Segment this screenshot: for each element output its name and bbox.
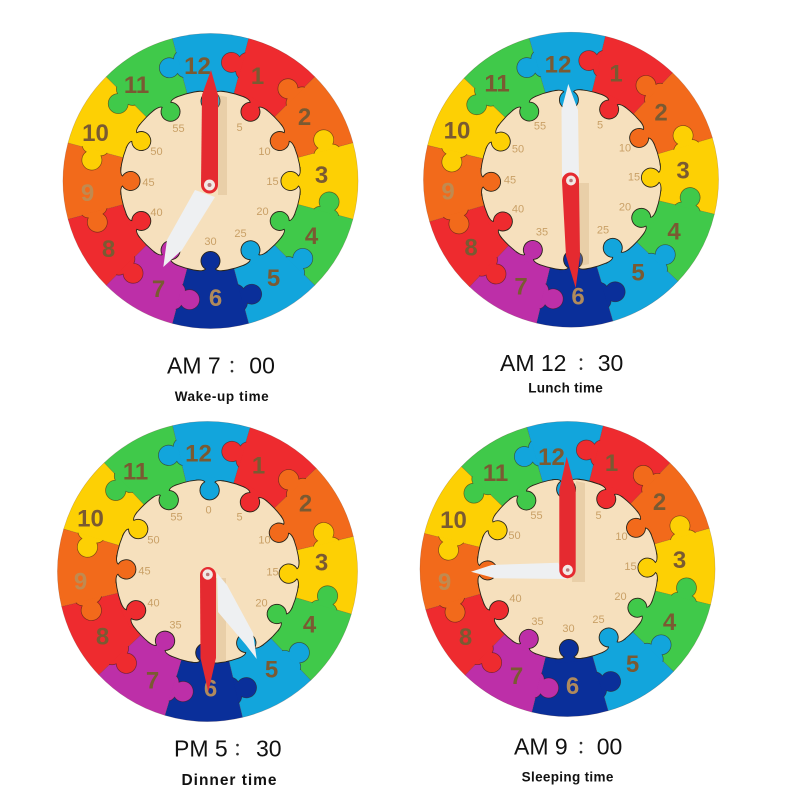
hour numbers: 12 <box>545 52 571 79</box>
hour numbers: 11 <box>483 460 508 487</box>
minute numbers: 50 <box>508 530 521 542</box>
hour numbers: 10 <box>444 118 470 145</box>
hour numbers: 1 <box>609 61 623 88</box>
caption: sleeping time: Sleeping time <box>522 770 614 785</box>
hour numbers <box>81 53 328 312</box>
minute numbers: 40 <box>147 598 160 610</box>
label: AM 12:30: ： <box>572 355 590 375</box>
minute numbers: 25 <box>234 228 247 240</box>
minute numbers: 20 <box>614 591 627 603</box>
minute numbers: 50 <box>147 534 160 546</box>
minute numbers: 15 <box>624 561 637 573</box>
minute numbers <box>142 122 279 248</box>
hour numbers <box>74 440 328 702</box>
clock: AM 12:30 lunch <box>420 28 722 331</box>
hands <box>163 70 227 267</box>
minute numbers: 45 <box>142 177 155 189</box>
minute numbers: 10 <box>258 534 271 546</box>
label: PM 5:30: ： <box>228 741 246 761</box>
hour numbers: 5 <box>265 656 278 684</box>
hour numbers: 7 <box>152 276 165 303</box>
hour numbers: 3 <box>315 550 328 576</box>
label: PM 5:30: PM 5 <box>174 736 228 762</box>
minute numbers: 35 <box>169 620 182 632</box>
caption: dinner time: Dinner time <box>182 772 277 789</box>
hour numbers <box>441 52 690 311</box>
hour numbers: 1 <box>252 452 265 480</box>
hour numbers: 6 <box>566 673 579 700</box>
hour numbers: 8 <box>102 236 115 263</box>
puzzle ring and wooden face <box>417 419 718 719</box>
minute numbers: 10 <box>615 531 628 543</box>
clock: AM 7:00 wake-up <box>63 34 358 328</box>
hour numbers: 10 <box>77 506 104 532</box>
label: AM 12:30: 30 <box>598 350 623 376</box>
hands <box>200 567 257 692</box>
hour numbers <box>438 444 686 700</box>
minute numbers: 30 <box>562 623 575 635</box>
hands <box>471 457 585 582</box>
minute numbers: 10 <box>258 146 271 158</box>
minute numbers: 5 <box>595 510 602 522</box>
hour numbers: 10 <box>440 507 467 534</box>
hour numbers: 2 <box>653 489 666 516</box>
puzzle ring and wooden face <box>54 418 361 725</box>
hour numbers: 3 <box>676 158 690 185</box>
hour numbers: 11 <box>484 71 510 98</box>
hour numbers: 4 <box>303 612 317 638</box>
minute numbers: 45 <box>138 566 151 578</box>
hour numbers: 12 <box>538 444 565 471</box>
minute numbers: 50 <box>150 146 163 158</box>
minute numbers: 55 <box>172 123 185 135</box>
minute numbers: 15 <box>266 566 279 578</box>
minute numbers <box>504 120 640 239</box>
minute numbers: 25 <box>597 225 609 237</box>
minute numbers: 55 <box>170 512 183 524</box>
hour numbers: 2 <box>299 490 312 518</box>
hour numbers: 4 <box>663 609 677 636</box>
minute numbers: 45 <box>504 175 516 187</box>
minute numbers: 15 <box>266 176 279 188</box>
puzzle ring and wooden face <box>63 34 358 328</box>
minute numbers: 25 <box>592 614 605 626</box>
label: AM 9:00: AM 9 <box>514 733 568 759</box>
hour numbers: 7 <box>146 668 159 694</box>
hour numbers: 2 <box>298 104 311 131</box>
minute numbers: 15 <box>628 172 640 184</box>
puzzle ring and wooden face <box>420 28 722 331</box>
label: AM 9:00: 00 <box>597 733 622 759</box>
hour numbers: 8 <box>459 624 472 651</box>
label: AM 7:00: AM 7 <box>167 352 221 378</box>
hour numbers: 9 <box>438 569 451 596</box>
hour numbers: 12 <box>185 440 212 468</box>
caption: wake-up time: Wake-up time <box>175 389 269 404</box>
minute numbers: 30 <box>204 236 217 248</box>
minute numbers <box>508 510 637 635</box>
label: AM 7:00: ： <box>223 357 241 377</box>
label: AM 7:00: 00 <box>249 352 275 378</box>
minute numbers <box>138 504 279 632</box>
minute numbers: 0 <box>205 504 212 516</box>
minute numbers: 20 <box>256 206 269 218</box>
hour numbers: 5 <box>267 265 280 292</box>
hour numbers: 7 <box>510 663 523 690</box>
minute numbers: 20 <box>619 202 631 214</box>
hour numbers: 8 <box>96 624 109 650</box>
hour numbers: 11 <box>124 72 149 99</box>
minute numbers: 5 <box>236 512 243 524</box>
hour numbers: 4 <box>305 223 319 250</box>
hour numbers: 9 <box>441 179 455 206</box>
hour numbers: 12 <box>184 53 211 80</box>
minute numbers: 5 <box>597 120 603 132</box>
hour numbers: 5 <box>631 260 645 287</box>
hour numbers: 1 <box>251 63 264 90</box>
label: PM 5:30: 30 <box>256 736 282 762</box>
minute numbers: 40 <box>509 593 522 605</box>
hour numbers: 5 <box>626 651 639 678</box>
hour numbers: 9 <box>81 180 94 207</box>
hour numbers: 2 <box>654 100 668 127</box>
clock: PM 5:30 dinner <box>54 418 361 725</box>
hour numbers: 6 <box>204 676 217 702</box>
hour numbers: 3 <box>673 547 686 574</box>
label: AM 12:30: AM 12 <box>500 350 566 376</box>
hour numbers: 10 <box>82 120 109 147</box>
hour numbers: 9 <box>74 568 87 596</box>
hour numbers: 4 <box>667 219 681 246</box>
caption: lunch time: Lunch time <box>528 381 603 396</box>
hour numbers: 11 <box>123 458 148 486</box>
hour numbers: 3 <box>315 162 328 189</box>
hour numbers: 6 <box>571 284 585 311</box>
minute numbers: 20 <box>255 598 268 610</box>
hands <box>562 84 589 288</box>
minute numbers: 50 <box>512 144 524 156</box>
hour numbers: 6 <box>209 285 222 312</box>
clock: AM 9:00 sleeping <box>417 419 718 719</box>
hour numbers: 1 <box>605 450 618 477</box>
minute numbers: 5 <box>236 122 243 134</box>
minute numbers: 55 <box>530 510 543 522</box>
minute numbers: 10 <box>619 143 631 155</box>
minute numbers: 40 <box>150 207 163 219</box>
minute numbers: 40 <box>512 204 524 216</box>
hour numbers: 7 <box>514 274 528 301</box>
label: AM 9:00: ： <box>572 738 590 758</box>
minute numbers: 55 <box>534 121 546 133</box>
minute numbers: 35 <box>536 227 548 239</box>
minute numbers: 35 <box>531 616 544 628</box>
hour numbers: 8 <box>464 235 478 262</box>
